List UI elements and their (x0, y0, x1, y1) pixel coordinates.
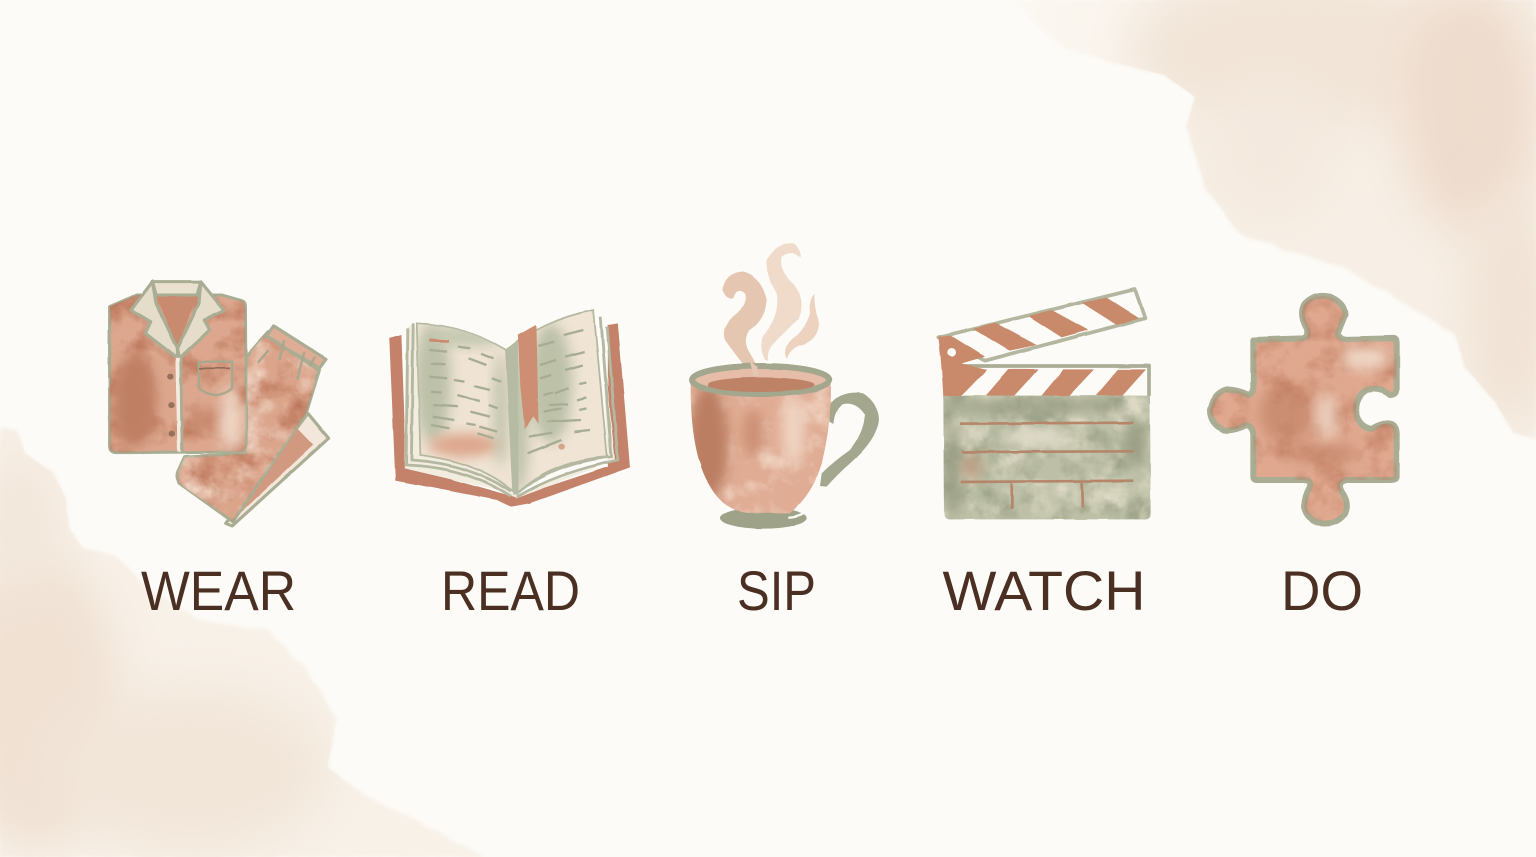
shirt pocket (199, 362, 232, 395)
label: READ: READ (441, 559, 580, 622)
clapper lower stick (962, 366, 1149, 397)
label: SIP: SIP (737, 559, 816, 622)
label: WEAR: WEAR (141, 559, 296, 622)
page stack (404, 317, 618, 498)
book spine (506, 340, 519, 495)
label: DO: DO (1281, 559, 1363, 622)
icon: pajamas (108, 282, 329, 527)
shirt buttons (167, 374, 175, 437)
pajama shirt (108, 282, 247, 453)
bookmark ribbon (518, 325, 539, 429)
watercolor wash: bottom left (0, 428, 483, 857)
icon: puzzle piece (1207, 293, 1400, 527)
icon: film clapperboard (938, 289, 1152, 522)
clapper top stick (938, 289, 1145, 361)
mug handle (820, 393, 879, 487)
label: WATCH: WATCH (942, 559, 1146, 622)
right page (506, 310, 607, 493)
mug base (720, 507, 807, 529)
mug body (690, 384, 832, 514)
book cover (389, 323, 630, 507)
left page (415, 323, 513, 492)
steam (722, 244, 818, 377)
clapper hinge (938, 335, 987, 397)
icon: steaming mug (688, 244, 879, 529)
watercolor wash: top right (1017, 0, 1536, 440)
icon: open book (389, 310, 630, 507)
mug rim and coffee (692, 362, 829, 394)
pajama trousers (172, 326, 329, 527)
clapper board (942, 393, 1152, 522)
